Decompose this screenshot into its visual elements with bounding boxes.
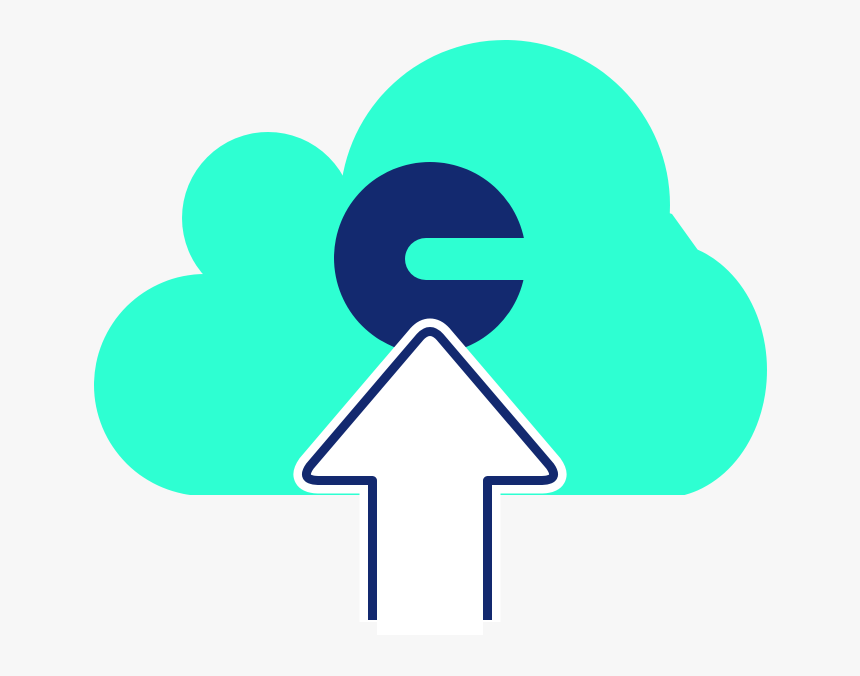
arrow [306,332,554,635]
cloud [94,40,767,500]
icon: e circle [334,162,530,354]
